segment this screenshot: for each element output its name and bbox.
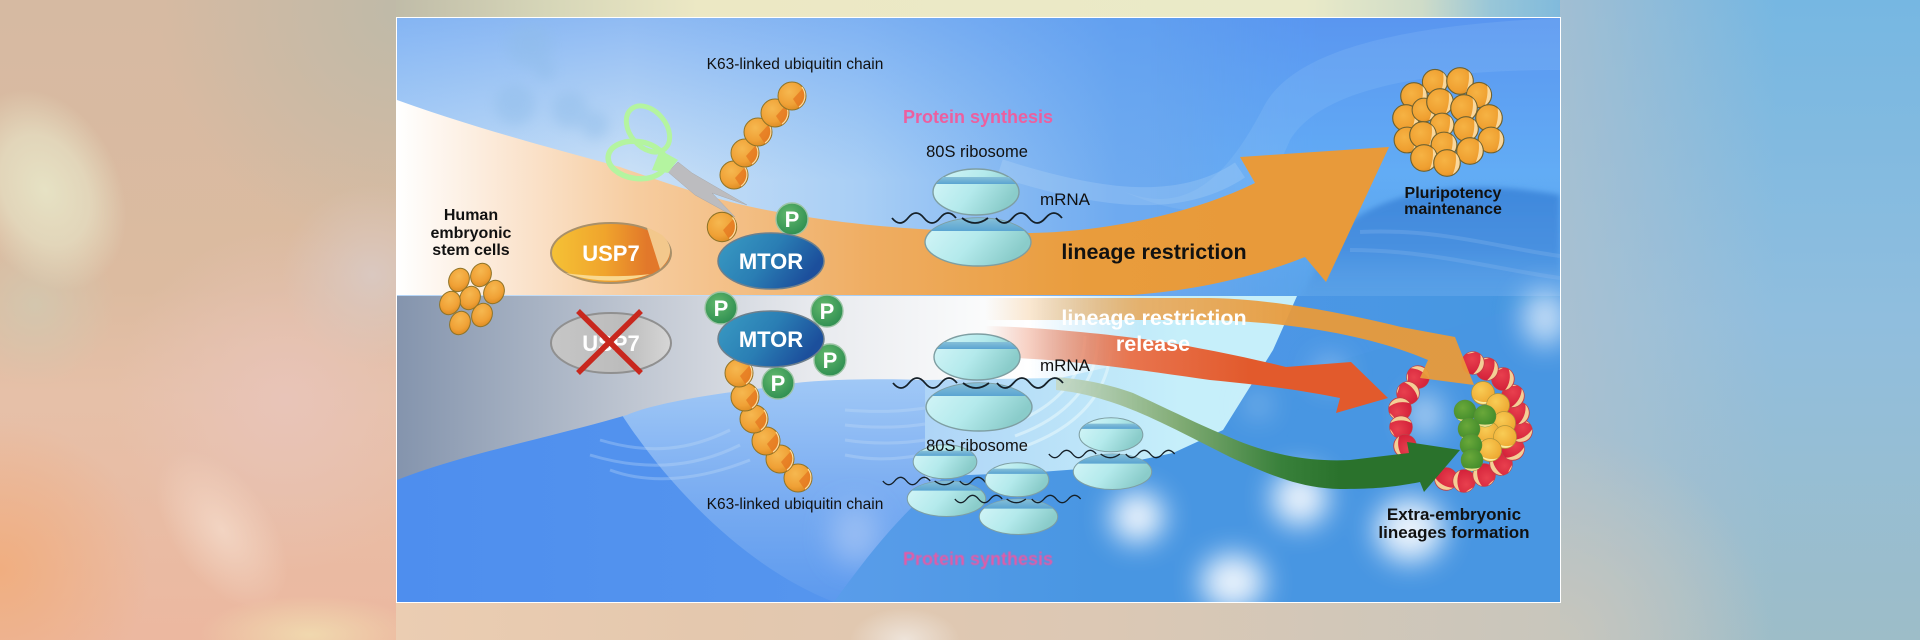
molecule: lower MTOR: MTOR <box>739 327 803 352</box>
page background left column <box>0 0 397 640</box>
ribosome: polysome left <box>882 444 986 517</box>
label: pluripotency maintenance: Pluripotency <box>1405 185 1502 202</box>
label: lower K63 chain: K63-linked ubiquitin chain <box>707 496 883 513</box>
cluster: human embryonic stem cells <box>439 262 505 336</box>
panel: lower grey-to-white band <box>397 296 1140 480</box>
cluster: pluripotency cells <box>1393 68 1504 176</box>
arrow: upper orange band to pluripotency <box>397 100 1389 295</box>
label: human embryonic stem cells: Human <box>444 207 498 224</box>
page background top and bottom strips <box>396 0 1561 640</box>
molecule: lower MTOR <box>718 311 824 367</box>
label: upper mRNA: mRNA <box>1040 190 1091 209</box>
upper sky background <box>397 18 1560 300</box>
molecule: inactive USP7 crossed out: USP7 <box>582 331 640 356</box>
label: upper protein synthesis: Protein synthesis <box>903 107 1053 127</box>
ball: cleaved ubiquitin <box>707 212 737 242</box>
label: pluripotency maintenance: maintenance <box>1404 201 1502 218</box>
label: lineage restriction release: release <box>1116 332 1190 356</box>
icon: scissors <box>606 98 747 217</box>
label: lower mRNA: mRNA <box>1040 356 1091 375</box>
molecule: upper MTOR: MTOR <box>739 249 803 274</box>
label: lineage restriction: lineage restriction <box>1061 240 1247 264</box>
icon: lower P group <box>705 292 846 399</box>
label: human embryonic stem cells: stem cells <box>432 242 510 259</box>
label: upper K63 chain: K63-linked ubiquitin chain <box>707 56 883 73</box>
molecule: upper MTOR <box>718 233 824 289</box>
molecule: USP7: USP7 <box>582 241 640 266</box>
ribosome: upper with mRNA <box>892 169 1062 266</box>
label: lower protein synthesis: Protein synthesis <box>903 549 1053 569</box>
ribosome: polysome right <box>1049 418 1175 490</box>
cluster: extra-embryonic cells <box>1387 348 1537 495</box>
molecule: inactive USP7 crossed out <box>551 311 671 373</box>
arrow: green to extra-embryonic <box>1056 377 1460 492</box>
label: upper 80S ribosome: 80S ribosome <box>926 143 1028 161</box>
arrow: orange to extra-embryonic <box>985 298 1474 385</box>
chain: lower K63-linked ubiquitin <box>725 359 812 492</box>
molecule: USP7 <box>551 223 671 283</box>
panel: diagram frame <box>396 17 1561 603</box>
label: lineage restriction release: lineage restriction <box>1061 306 1247 330</box>
ribosome: polysome middle <box>955 463 1081 535</box>
icon: upper P <box>776 203 808 235</box>
arrow: red to extra-embryonic <box>985 326 1388 413</box>
ribosome: lower with mRNA <box>893 334 1063 431</box>
label: human embryonic stem cells: embryonic <box>431 225 512 242</box>
label: extra-embryonic lineages formation: lineages formation <box>1378 523 1530 542</box>
page background right column <box>1560 0 1920 640</box>
label: extra-embryonic lineages formation: Extra-embryonic <box>1387 505 1521 524</box>
lower background <box>397 290 1567 610</box>
chain: upper K63-linked ubiquitin <box>720 82 806 189</box>
label: lower 80S ribosome: 80S ribosome <box>926 437 1028 455</box>
panel: diagram artwork <box>397 18 1567 610</box>
